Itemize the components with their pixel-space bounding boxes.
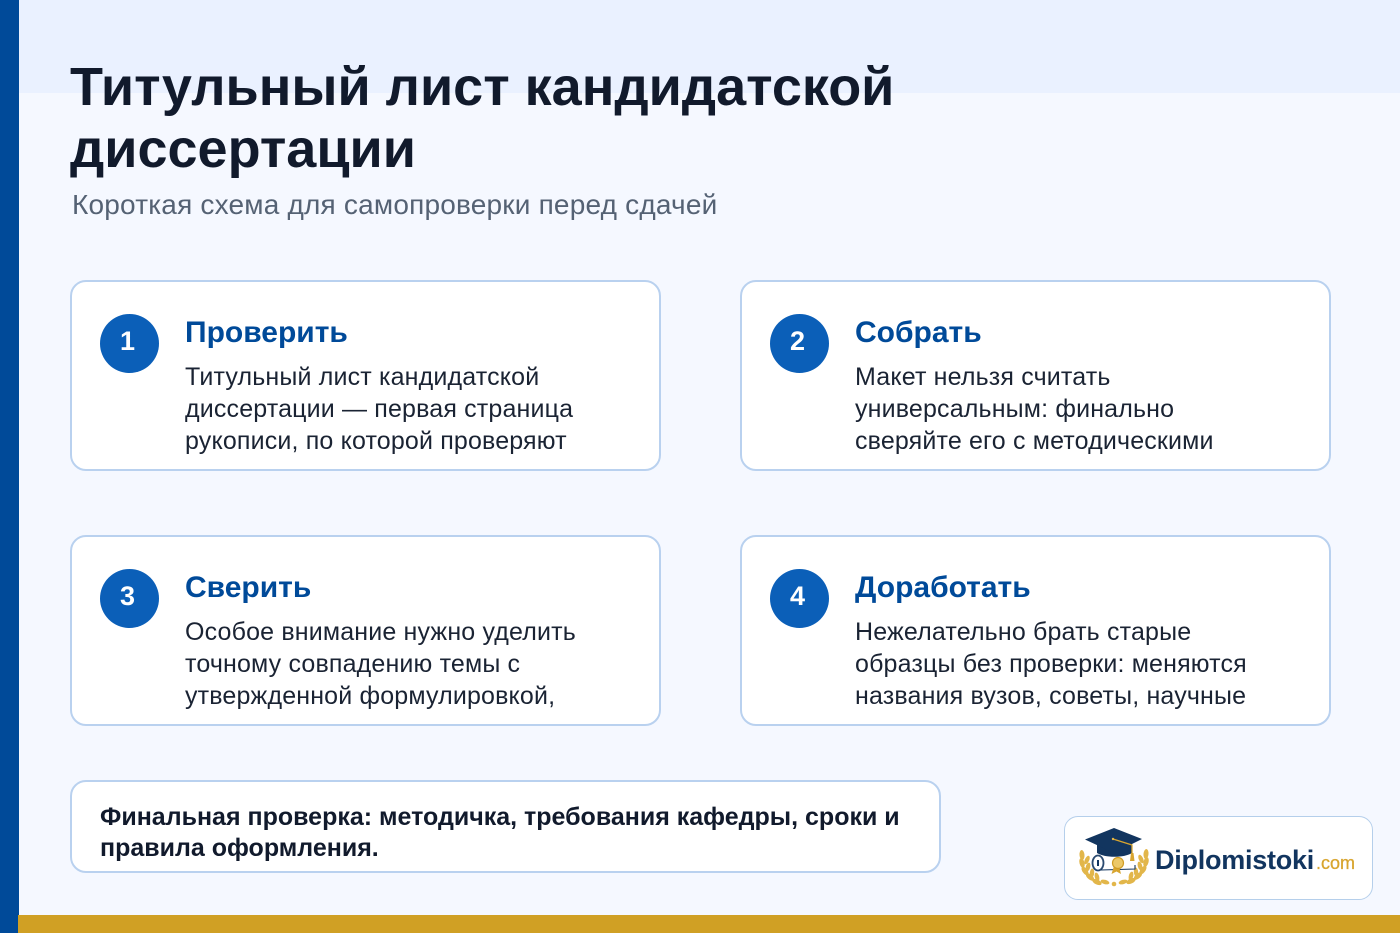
title <box>70 57 894 179</box>
step number 2 <box>770 314 829 373</box>
step 3 text: Особое внимание нужно уделить <box>185 618 576 646</box>
laurel left <box>1078 850 1110 886</box>
step 2 heading: Собрать <box>855 316 982 349</box>
step number 3: 3 <box>120 581 135 611</box>
callout text: Финальная проверка: методичка, требования кафедры, сроки и <box>100 803 900 831</box>
step number 1 <box>100 314 159 373</box>
diploma scroll <box>1099 856 1135 870</box>
ribbon and seal <box>1112 866 1121 874</box>
header band <box>18 0 1400 93</box>
step 1 text <box>185 363 574 455</box>
bottom accent bar <box>18 915 1400 933</box>
step 1 text: рукописи, по которой проверяют <box>185 427 567 455</box>
bead <box>1112 882 1116 886</box>
step number 4 <box>770 569 829 628</box>
callout: final check <box>70 780 941 873</box>
logo card <box>1064 816 1373 900</box>
step 3 text: утвержденной формулировкой, <box>185 682 555 710</box>
callout text <box>100 803 900 862</box>
panel: step 3 <box>70 535 661 726</box>
cap base <box>1097 844 1132 857</box>
step 3 text: точному совпадению темы с <box>185 650 520 678</box>
step 2 text: универсальным: финально <box>855 395 1174 423</box>
step 4 heading: Доработать <box>855 571 1031 604</box>
step number 4: 4 <box>790 581 805 611</box>
step 4 text: Нежелательно брать старые <box>855 618 1191 646</box>
title: диссертации <box>70 119 416 179</box>
step 4 text: образцы без проверки: меняются <box>855 650 1247 678</box>
tassel <box>1113 839 1132 854</box>
panel: step 1 <box>70 280 661 471</box>
left accent bar <box>0 0 19 933</box>
step number 2: 2 <box>790 326 805 356</box>
step 3 heading: Сверить <box>185 571 311 604</box>
step 4 text <box>855 618 1247 710</box>
step 4 text: названия вузов, советы, научные <box>855 682 1246 710</box>
step 2 text <box>855 363 1214 455</box>
panel: step 4 <box>740 535 1331 726</box>
subtitle: Короткая схема для самопроверки перед сдачей <box>72 189 717 220</box>
step 2 text: Макет нельзя считать <box>855 363 1111 391</box>
logo wordmark: Diplomistoki.com <box>1155 845 1355 875</box>
step 2 text: сверяйте его с методическими <box>855 427 1214 455</box>
step 1 heading: Проверить <box>185 316 348 349</box>
logo icon: graduation cap with laurel <box>1079 828 1149 886</box>
cap top <box>1085 828 1142 853</box>
laurel right <box>1118 849 1150 885</box>
title: Титульный лист кандидатской <box>70 57 894 117</box>
step 3 text <box>185 618 576 710</box>
callout text: правила оформления. <box>100 834 379 862</box>
step 1 text: диссертации — первая страница <box>185 395 573 423</box>
step number 1: 1 <box>120 326 135 356</box>
panel: step 2 <box>740 280 1331 471</box>
step 1 text: Титульный лист кандидатской <box>185 363 539 391</box>
step number 3 <box>100 569 159 628</box>
